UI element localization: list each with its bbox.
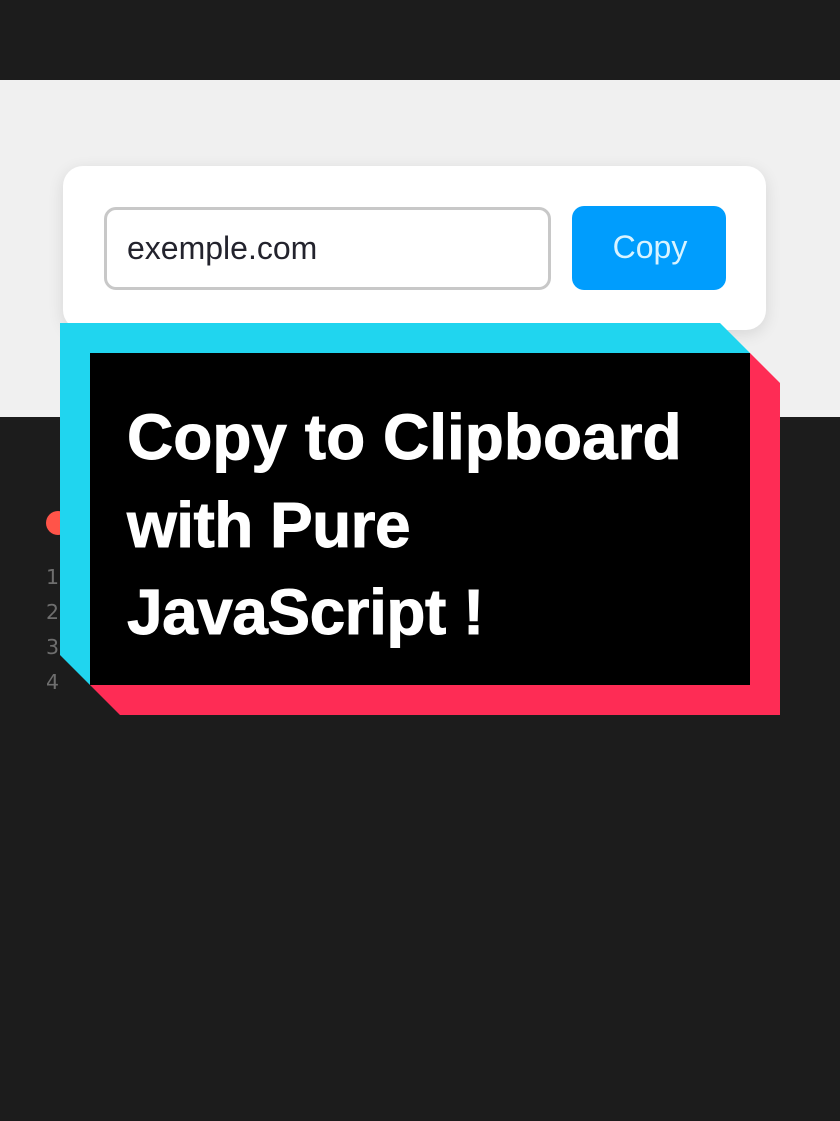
- banner heading: [126, 401, 682, 648]
- copy widget card: [63, 166, 766, 330]
- banner heading: JavaScript !: [127, 576, 484, 648]
- banner heading: with Pure: [127, 489, 410, 561]
- preview panel: [0, 80, 840, 417]
- banner heading: Copy to Clipboard: [127, 401, 682, 473]
- line numbers: 3: [46, 635, 59, 659]
- line numbers: 2: [46, 600, 59, 624]
- code editor panel: [0, 417, 840, 1121]
- red window dot: [46, 511, 70, 535]
- line numbers: 4: [46, 670, 59, 694]
- line numbers: 1: [46, 565, 59, 589]
- line numbers: [46, 565, 59, 694]
- copy button: Copy: [613, 229, 687, 265]
- text input: [104, 207, 551, 290]
- text input: exemple.com: [127, 230, 317, 266]
- title banner: [60, 323, 780, 715]
- banner offset shapes: [60, 323, 780, 715]
- copy button: [572, 206, 726, 290]
